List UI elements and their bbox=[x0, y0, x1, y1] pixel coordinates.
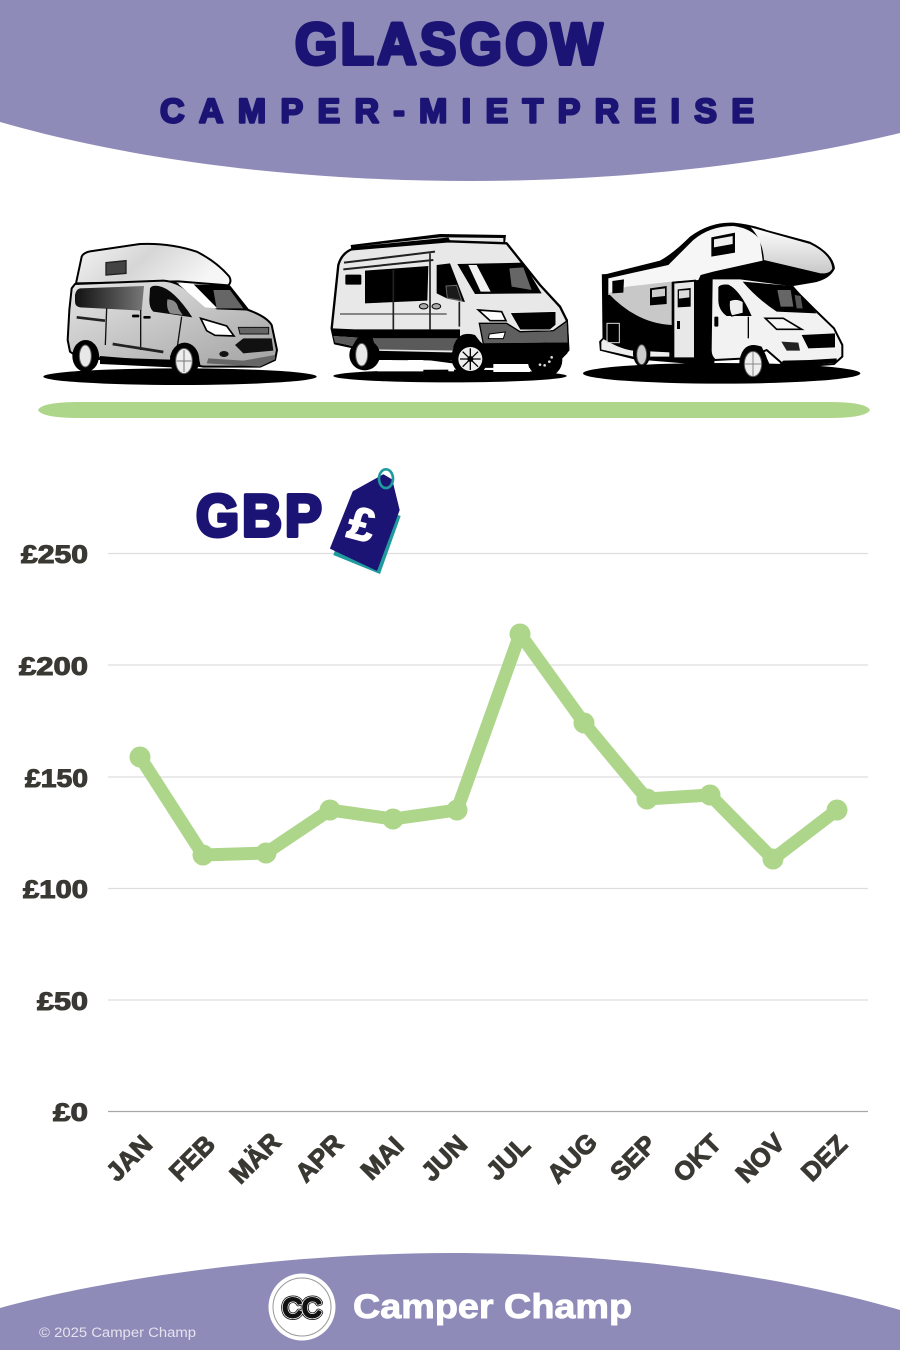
copyright: © 2025 Camper Champ bbox=[39, 1325, 196, 1340]
x axis labels: OKT bbox=[667, 1128, 727, 1188]
icon: alcove motorhome bbox=[583, 223, 860, 384]
x axis labels: JUN bbox=[415, 1129, 473, 1187]
y axis labels: £150 bbox=[25, 765, 88, 793]
brand name: Camper Champ bbox=[353, 1288, 632, 1326]
header banner bbox=[0, 0, 900, 181]
icon: campervan with high roof bbox=[43, 244, 317, 385]
x axis labels: FEB bbox=[163, 1129, 221, 1187]
x axis labels: JUL bbox=[480, 1130, 536, 1186]
data points bbox=[130, 624, 848, 870]
logo badge: CC bbox=[282, 1293, 322, 1323]
x axis labels: MÄR bbox=[223, 1126, 287, 1190]
x axis labels: APR bbox=[289, 1128, 349, 1188]
y axis labels: £250 bbox=[21, 541, 88, 569]
logo badge: CC bbox=[282, 1293, 322, 1323]
gridlines bbox=[108, 554, 868, 1112]
x axis labels: MAI bbox=[355, 1131, 409, 1185]
y axis labels: £100 bbox=[23, 876, 88, 904]
x axis labels: JAN bbox=[100, 1129, 158, 1187]
data line bbox=[140, 634, 837, 859]
title: GLASGOW bbox=[295, 11, 606, 76]
icon: sprinter van bbox=[332, 234, 568, 382]
y axis labels bbox=[19, 541, 88, 1127]
y axis labels: £0 bbox=[53, 1099, 88, 1127]
x axis labels: AUG bbox=[541, 1127, 603, 1189]
x axis labels: SEP bbox=[604, 1129, 662, 1187]
line chart bbox=[19, 541, 868, 1190]
x axis labels bbox=[100, 1126, 853, 1190]
x axis labels: NOV bbox=[729, 1127, 791, 1189]
footer banner bbox=[0, 1253, 900, 1350]
y axis labels: £50 bbox=[37, 988, 88, 1016]
icon: pound price tag bbox=[331, 469, 401, 574]
green divider bar bbox=[38, 402, 870, 418]
currency label: GBP bbox=[196, 483, 325, 549]
x axis labels: DEZ bbox=[795, 1129, 853, 1187]
logo badge bbox=[268, 1274, 336, 1340]
subtitle: CAMPER-MIETPREISE bbox=[160, 92, 754, 130]
icon: pound price tag: £ bbox=[342, 496, 381, 553]
logo badge: CC bbox=[282, 1293, 322, 1323]
y axis labels: £200 bbox=[19, 653, 88, 681]
